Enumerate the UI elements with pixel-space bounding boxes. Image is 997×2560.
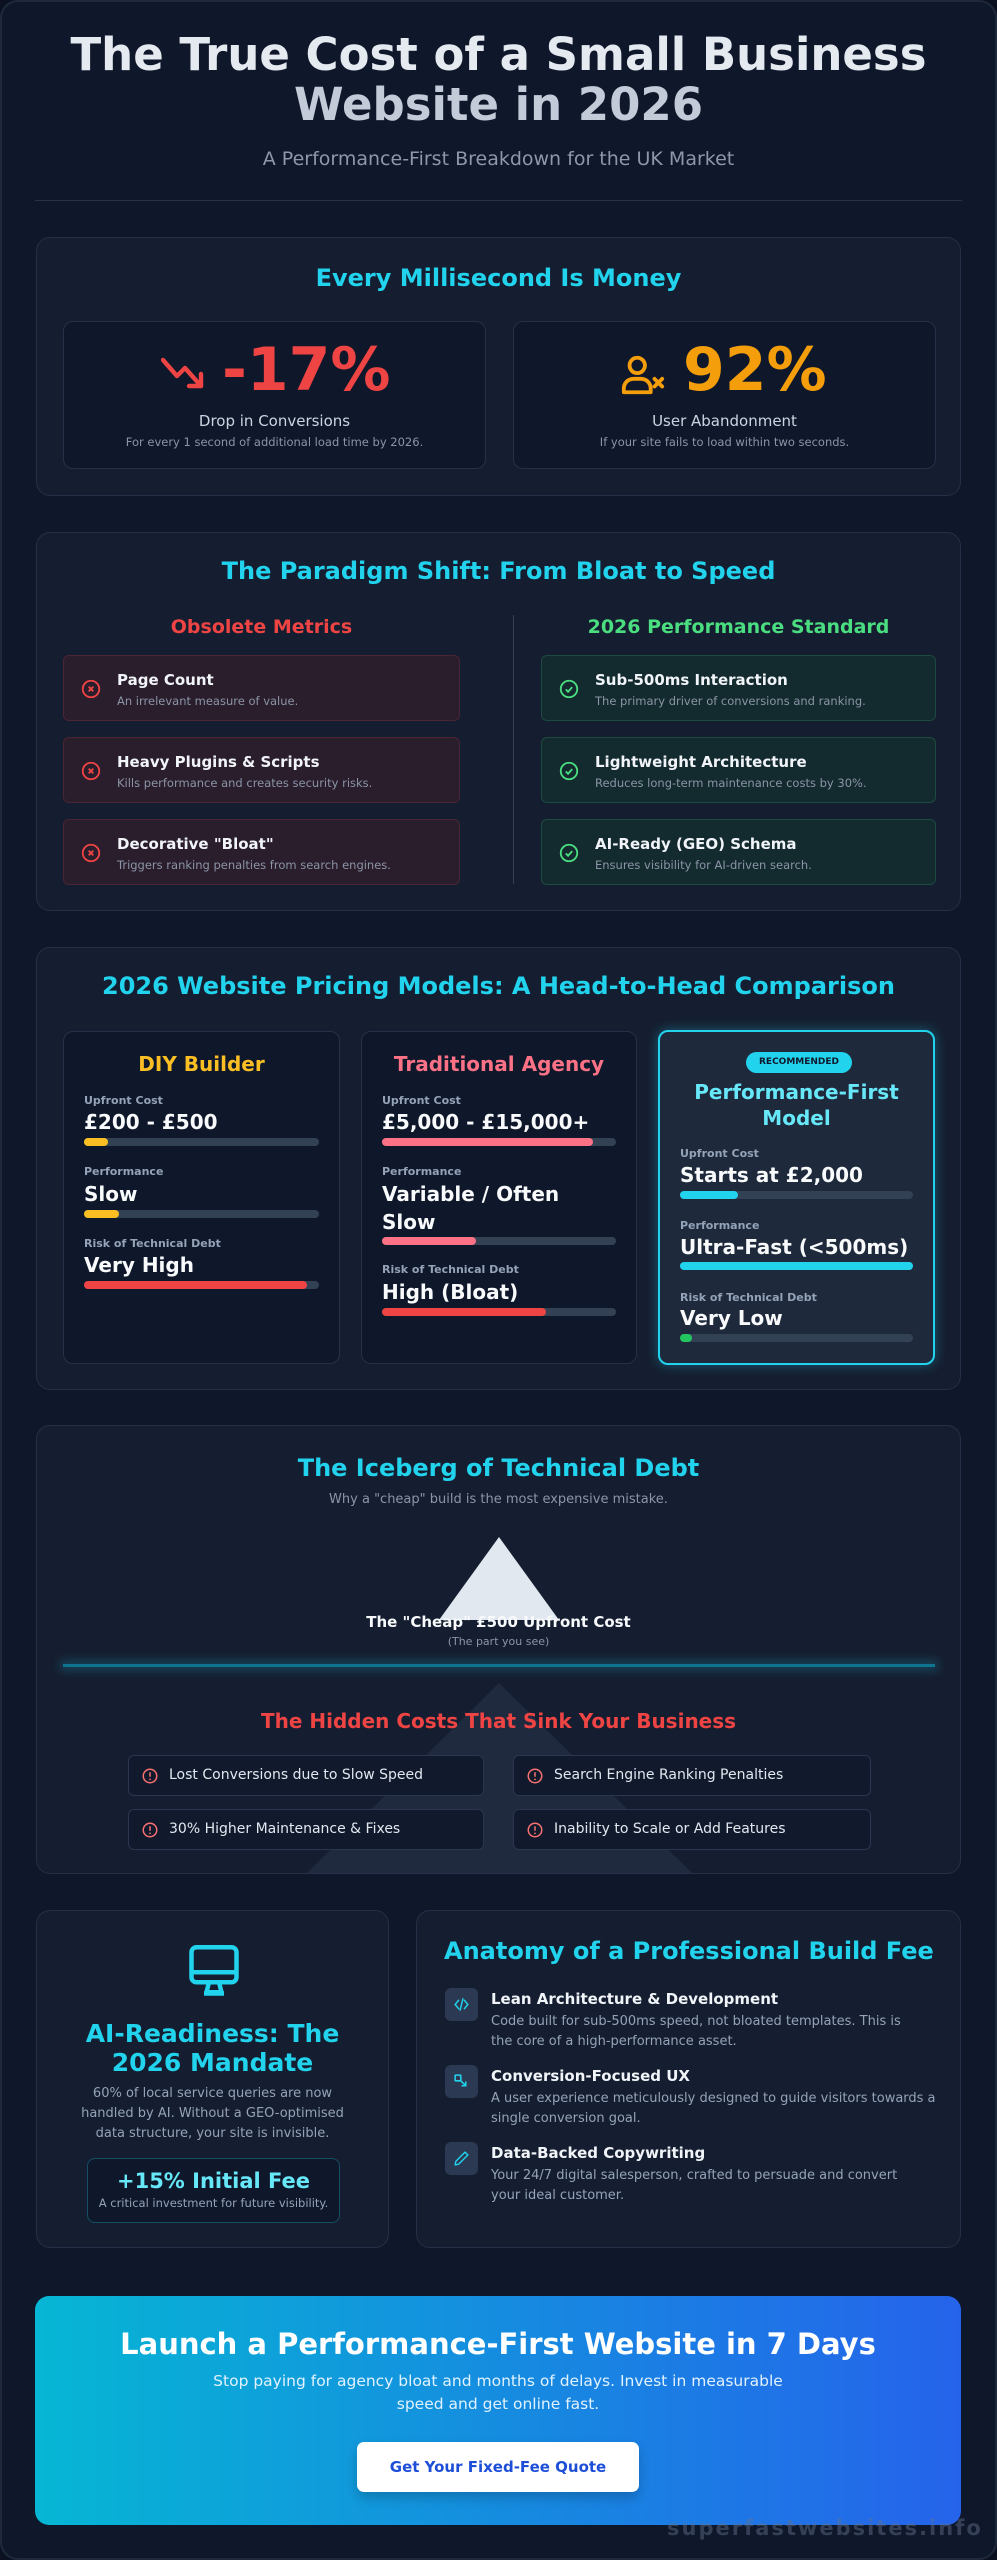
card: performance-first (recommended): Starts at £2,000 [680, 1163, 863, 1187]
item: lightweight [541, 737, 936, 803]
hidden cost: conversions [128, 1755, 484, 1796]
card: performance-first (recommended): Risk of Technical Debt [680, 1291, 817, 1304]
panel: every millisecond is money [36, 237, 961, 496]
panel: AI readiness [36, 1910, 389, 2248]
hidden cost: maintenance [128, 1809, 484, 1850]
card: DIY builder: Very High [84, 1253, 194, 1277]
badge: RECOMMENDED [759, 1057, 839, 1067]
panel: paradigm shift [36, 532, 961, 911]
column heading: obsolete: Obsolete Metrics [171, 616, 352, 638]
item: page count: Page Count [117, 671, 214, 689]
item: heavy plugins: Heavy Plugins & Scripts [117, 753, 320, 771]
card: performance-first (recommended): Ultra-Fast (<500ms) [680, 1235, 908, 1259]
stat card: abandonment [513, 321, 936, 469]
hidden costs heading: The Hidden Costs That Sink Your Business [261, 1709, 736, 1733]
panel: iceberg [36, 1425, 961, 1874]
stat label: User Abandonment [652, 412, 797, 430]
panel: anatomy of build fee: A user experience meticulously designed to guide visitors towards a single conversion goal. [491, 2091, 936, 2126]
item: copywriting [445, 2142, 897, 2203]
subtitle: A Performance-First Breakdown for the UK Market [263, 148, 734, 170]
card: DIY builder [63, 1031, 340, 1364]
item: lightweight: Reduces long-term maintenance costs by 30%. [595, 776, 867, 790]
item: AI-ready: AI-Ready (GEO) Schema [595, 835, 797, 853]
CTA body: Stop paying for agency bloat and months of delays. Invest in measurable [213, 2372, 783, 2390]
card: DIY builder: Upfront Cost [84, 1094, 163, 1107]
hidden cost: ranking: Search Engine Ranking Penalties [554, 1767, 783, 1783]
card: DIY builder: Performance [84, 1165, 163, 1178]
CTA button [357, 2442, 639, 2492]
hidden cost: scale [513, 1809, 871, 1850]
stat card: conversions [63, 321, 486, 469]
hidden cost: maintenance: 30% Higher Maintenance & Fixes [169, 1821, 400, 1837]
stat number: 92% [683, 335, 827, 405]
badge [746, 1052, 852, 1073]
panel: pricing models [36, 947, 961, 1390]
card: performance-first (recommended): Upfront Cost [680, 1147, 759, 1160]
waterline [63, 1664, 935, 1667]
heading: The Paradigm Shift: From Bloat to Speed [222, 557, 775, 585]
fee callout [87, 2158, 340, 2223]
icon: trending down [161, 358, 204, 388]
fee callout: +15% Initial Fee [117, 2169, 310, 2193]
card: traditional agency: Slow [382, 1210, 435, 1234]
panel: anatomy of build fee [416, 1910, 961, 2248]
CTA body: speed and get online fast. [397, 2395, 599, 2413]
title [70, 28, 927, 131]
item: decorative bloat: Decorative "Bloat" [117, 835, 274, 853]
watermark: superfastwebsites.info [667, 2516, 983, 2540]
tip label: The "Cheap" £500 Upfront Cost [366, 1613, 631, 1631]
card: traditional agency: Performance [382, 1165, 461, 1178]
iceberg tip [440, 1537, 558, 1620]
item: sub-500ms: The primary driver of conversions and ranking. [595, 694, 866, 708]
card: traditional agency: Variable / Often [382, 1182, 559, 1206]
heading: The Iceberg of Technical Debt [298, 1454, 699, 1482]
item: AI-ready: Ensures visibility for AI-driven search. [595, 858, 812, 872]
stat label: Drop in Conversions [199, 412, 350, 430]
panel: anatomy of build fee: Conversion-Focused UX [491, 2067, 690, 2085]
CTA body [213, 2372, 783, 2413]
item: sub-500ms: Sub-500ms Interaction [595, 671, 788, 689]
panel: anatomy of build fee: Data-Backed Copywriting [491, 2144, 705, 2162]
hidden cost: ranking [513, 1755, 871, 1796]
item: conversion UX [445, 2065, 936, 2126]
item: lightweight: Lightweight Architecture [595, 753, 807, 771]
panel: anatomy of build fee: Lean Architecture & Development [491, 1990, 778, 2008]
card: performance-first (recommended): Performance-First [694, 1080, 899, 1104]
CTA heading: Launch a Performance-First Website in 7 Days [120, 2327, 876, 2361]
item: lean architecture [445, 1988, 901, 2049]
underwater iceberg [308, 1684, 692, 1873]
heading: 2026 Mandate [112, 2048, 313, 2077]
item: page count [63, 655, 460, 721]
panel: anatomy of build fee: Code built for sub-500ms speed, not bloated templates. This is the core of a high-performance asset. [491, 2014, 901, 2049]
card: performance-first (recommended): Very Low [680, 1306, 783, 1330]
icon: monitor [189, 1945, 239, 1996]
heading: AI-Readiness: The [86, 2019, 339, 2048]
item: decorative bloat: Triggers ranking penalties from search engines. [117, 858, 391, 872]
panel: iceberg: (The part you see) [448, 1635, 549, 1648]
hidden cost: scale: Inability to Scale or Add Features [554, 1821, 786, 1837]
heading: Anatomy of a Professional Build Fee [444, 1937, 934, 1965]
stat card: conversions: For every 1 second of additional load time by 2026. [126, 435, 423, 449]
card: traditional agency: Upfront Cost [382, 1094, 461, 1107]
item: sub-500ms [541, 655, 936, 721]
item: page count: An irrelevant measure of value. [117, 694, 298, 708]
CTA banner [35, 2296, 961, 2525]
card: performance-first (recommended) [658, 1030, 935, 1365]
card: DIY builder: Slow [84, 1182, 137, 1206]
item: heavy plugins: Kills performance and creates security risks. [117, 776, 372, 790]
fee callout: A critical investment for future visibility. [99, 2196, 328, 2210]
card: traditional agency: £5,000 - £15,000+ [382, 1110, 589, 1134]
card: traditional agency: Traditional Agency [394, 1052, 604, 1076]
item: decorative bloat [63, 819, 460, 885]
item: AI-ready [541, 819, 936, 885]
hidden cost: conversions: Lost Conversions due to Slow Speed [169, 1767, 423, 1783]
CTA button: Get Your Fixed-Fee Quote [390, 2458, 606, 2476]
panel: iceberg: Why a "cheap" build is the most expensive mistake. [329, 1492, 668, 1507]
stat number: -17% [222, 335, 391, 405]
card: DIY builder: Risk of Technical Debt [84, 1237, 221, 1250]
card: DIY builder: £200 - £500 [84, 1110, 218, 1134]
icon: user x [622, 356, 664, 394]
card: traditional agency: High (Bloat) [382, 1280, 518, 1304]
card: DIY builder: DIY Builder [138, 1052, 265, 1076]
heading: Every Millisecond Is Money [316, 264, 681, 292]
card: performance-first (recommended): Model [762, 1106, 831, 1130]
stat card: abandonment: If your site fails to load within two seconds. [600, 435, 849, 449]
heading: 2026 Website Pricing Models: A Head-to-Head Comparison [102, 972, 895, 1000]
title: Website in 2026 [294, 78, 703, 131]
heading [86, 2019, 339, 2077]
title: The True Cost of a Small Business [70, 28, 927, 81]
card: traditional agency [361, 1031, 637, 1364]
item: heavy plugins [63, 737, 460, 803]
panel: anatomy of build fee: Your 24/7 digital salesperson, crafted to persuade and convert your ideal customer. [491, 2168, 897, 2203]
card: performance-first (recommended): Performance [680, 1219, 759, 1232]
column heading: standard: 2026 Performance Standard [588, 616, 889, 638]
body: 60% of local service queries are now handled by AI. Without a GEO-optimised data structure, your site is invisible. [81, 2086, 344, 2141]
card: traditional agency: Risk of Technical Debt [382, 1263, 519, 1276]
